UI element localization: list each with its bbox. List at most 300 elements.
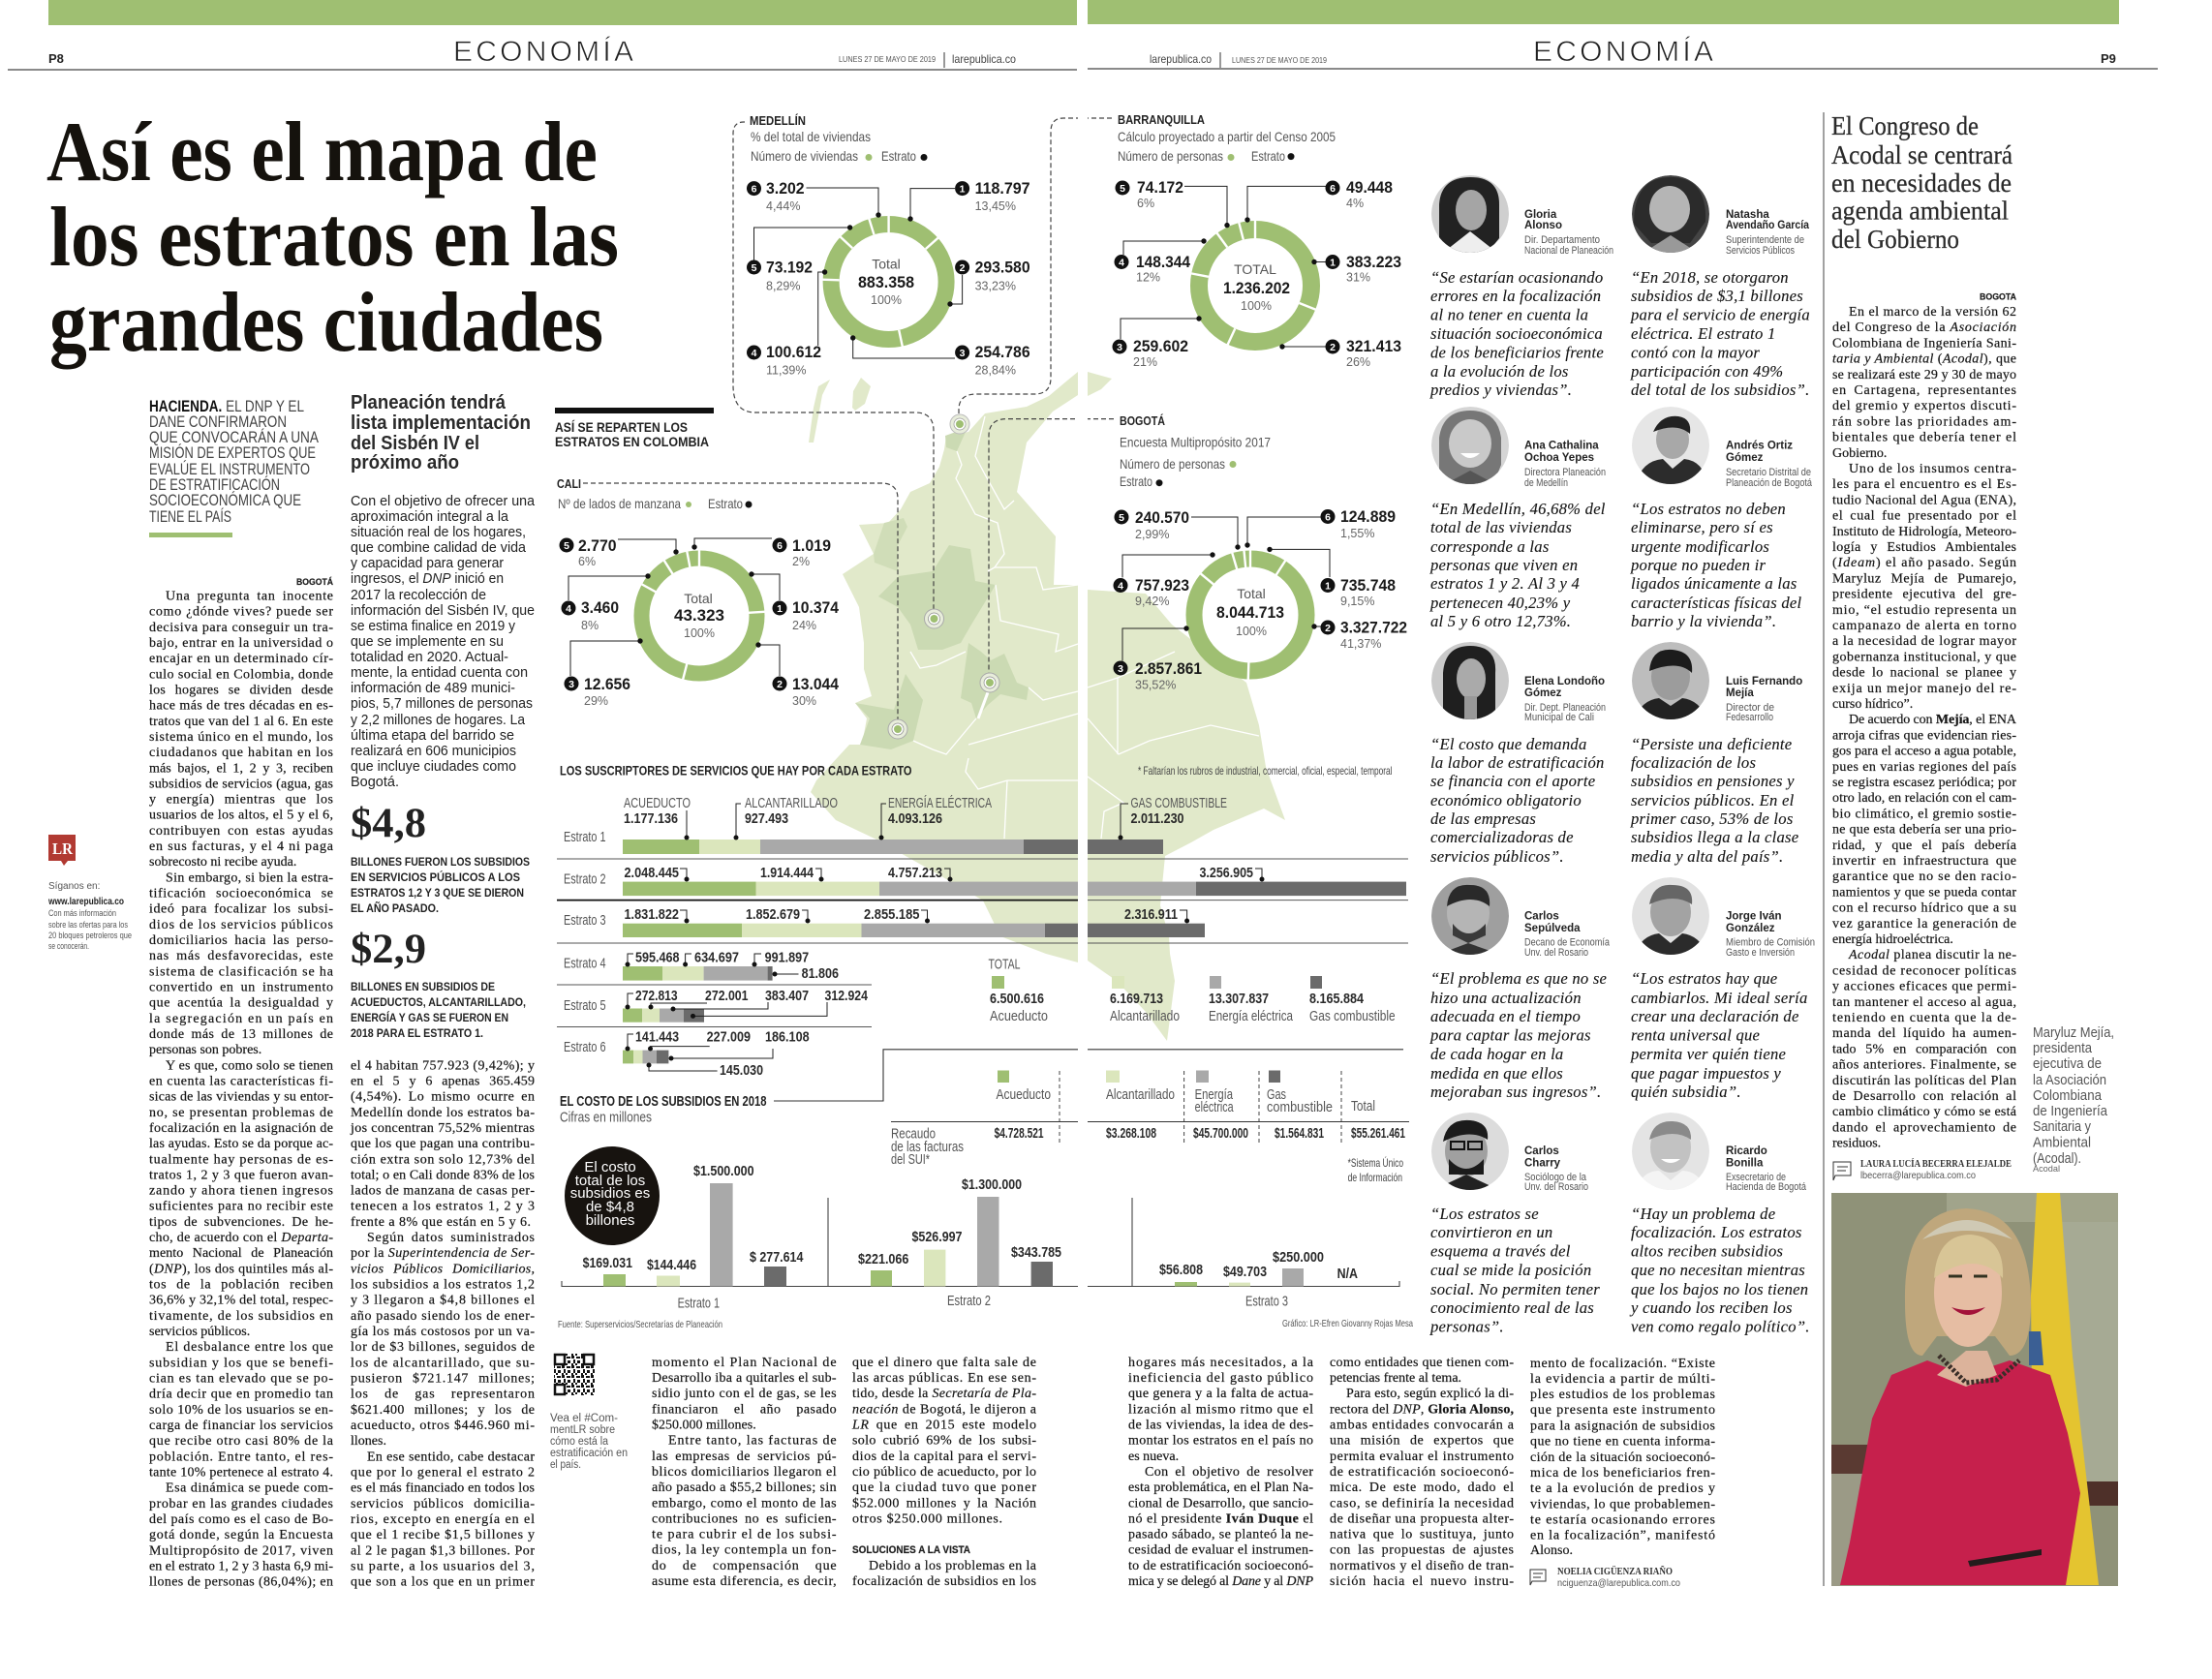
side story body: gobernanza institucional, y que (1832, 650, 2016, 664)
column 2 body (350, 1058, 535, 1590)
side story headline: agenda ambiental (1831, 196, 2009, 225)
side story body: gos para el acceso a agua potable, (1832, 745, 2016, 759)
quote block Natasha Avendaño: contó con la mayor (1631, 344, 1760, 362)
article column 4: otros $250.000 millones. (852, 1511, 1002, 1526)
article column 1: en sus facturas, y el 4 ni paga (149, 840, 334, 854)
Cali values: 6 (777, 540, 783, 552)
Cali values: 10.374 (792, 598, 839, 617)
estrato 6 row: Estrato 6 (564, 1039, 606, 1055)
estrato 1 row: 4.093.126 (888, 811, 942, 827)
article column 1: BOGOTÁ (296, 577, 333, 588)
quote block Ana Cathalina Ochoa: total de las viviendas (1430, 518, 1572, 536)
Medellín values: 3 (960, 348, 966, 359)
article column 6: como entidades que tienen com- (1330, 1356, 1514, 1370)
credit: Gráfico: LR-Efren Giovanny Rojas Mesa (1282, 1318, 1413, 1329)
quote block Ricardo Bonilla: que los bajos no los tienen (1631, 1280, 1808, 1298)
Bogotá values: 124.889 (1340, 507, 1396, 526)
article column 1: que recibe otro casi 80% de la (149, 1434, 334, 1449)
sidebar intro text: totalidad en 2020. Actual- (351, 650, 508, 665)
photo caption: Sanitaria y (2033, 1119, 2092, 1135)
Medellín values: 28,84% (975, 364, 1016, 378)
quote block Carlos Charry: Sociólogo de la (1524, 1172, 1587, 1183)
column 2 body: Medellín donde los estratos ba- (351, 1106, 535, 1120)
quote block Carlos Sepúlveda: “El problema es que no se (1430, 969, 1607, 988)
quote block Carlos Sepúlveda: Unv. del Rosario (1524, 947, 1588, 959)
quote block Elena Londoño: Elena Londoño (1524, 676, 1605, 687)
column 2 body: acueducto, otros $446.960 mi- (351, 1419, 535, 1433)
article column 7: que presenta este instrumento (1530, 1403, 1715, 1418)
article column 1: gotá donde, según la Encuesta (149, 1528, 334, 1542)
sidebar LR follow: LR (52, 840, 74, 858)
Medellín values: 33,23% (975, 279, 1016, 292)
quote block Ricardo Bonilla: que no necesitan mientras (1631, 1261, 1805, 1279)
QR caption: mentLR sobre (550, 1424, 615, 1436)
quote block Andrés Ortiz: Andrés Ortiz (1726, 440, 1793, 451)
donut Barranquilla: 100% (1241, 299, 1272, 313)
article column 6: una misión de expertos que (1330, 1434, 1514, 1449)
quote block Carlos Charry: personas”. (1429, 1317, 1504, 1336)
infographic heading: ASÍ SE REPARTEN LOS (555, 419, 688, 435)
Cali values: 2 (777, 679, 783, 690)
article column 5: mica y se delegó al Dane y al DNP (1128, 1574, 1313, 1589)
quote block Luis Fernando Mejía: Mejía (1726, 687, 1754, 699)
side story body: vez garantice la generación de (1832, 917, 2016, 931)
revenue table: eléctrica (1195, 1099, 1234, 1115)
article column 1: que acentúa la desigualdad y (149, 996, 333, 1011)
quote block Ricardo Bonilla: “Hay un problema de (1631, 1205, 1775, 1223)
Cali values: 4 (566, 603, 571, 615)
sidebar intro text: que se implemente en su (351, 634, 504, 650)
bars estrato 3: $56.808 (1159, 1263, 1203, 1278)
article column 1: ideó para focalizar los subsi- (149, 902, 333, 917)
chart footnote: * Faltarían los rubros de industrial, comercial, oficial, especial, temporal (1138, 764, 1393, 778)
Medellín values: 73.192 (766, 259, 813, 277)
donut Bogotá: 8.044.713 (1216, 603, 1284, 622)
photo caption: Ambiental (2033, 1136, 2091, 1151)
totals legend: 13.307.837 (1209, 992, 1269, 1007)
sidebar LR follow: 20 bloques petroleros que (48, 931, 132, 940)
article column 4: SOLUCIONES A LA VISTA (852, 1544, 970, 1556)
sidebar heading (351, 392, 531, 473)
estrato 5 row (564, 989, 868, 1023)
Medellín values: 8,29% (766, 279, 800, 292)
donut Bogotá: 100% (1236, 625, 1267, 638)
side story body: dando el aprovechamiento de (1832, 1120, 2016, 1135)
column 2 body: lados de manzana de casas per- (351, 1184, 535, 1199)
article column 4: cio público de acueducto, por lo (852, 1465, 1036, 1480)
quote block Luis Fernando Mejía: Fedesarrollo (1726, 712, 1773, 723)
Cali values: 2.770 (578, 536, 616, 555)
column 2 body: servicios públicos domicilia- (351, 1497, 535, 1511)
Barranquilla values: 5 (1120, 183, 1125, 195)
article column 6: de diseñar una propuesta alter- (1330, 1511, 1514, 1526)
header P8: P8 (48, 51, 64, 66)
infographic heading (555, 408, 714, 449)
stat 4,8 billones (351, 801, 530, 915)
article column 6: permita evaluar el instrumento (1330, 1450, 1514, 1464)
side story body: (Ideam) el año pasado. Según (1832, 556, 2016, 570)
quote block Andrés Ortiz: urgente modificarlos (1631, 537, 1769, 556)
Bogotá values: 9,42% (1135, 595, 1169, 608)
Bogotá values (1114, 507, 1407, 692)
Medellín values: 6 (752, 184, 757, 196)
sidebar intro text: que incluye ciudades como (351, 759, 516, 775)
header band right (1088, 0, 2119, 24)
axes (562, 1198, 1399, 1286)
quotes: portrait Carlos Sepúlveda (1431, 877, 1509, 955)
title: los estratos en las (49, 191, 619, 285)
article column 3: Entre tanto, las facturas de (668, 1434, 837, 1449)
panel: Bogotá: Encuesta Multipropósito 2017 (1120, 435, 1271, 450)
column 2 body: ción extra son solo 12,73% del (351, 1152, 535, 1167)
Barranquilla values: 321.413 (1346, 337, 1401, 355)
subheading hacienda: SOCIOECONÓMICA QUE (149, 491, 301, 509)
sidebar intro text: información del Sisbén IV, que (351, 603, 535, 619)
quotes: portrait Ana Cathalina Ochoa (1431, 407, 1509, 484)
article column 1: tante 10% pertenece al estrato 4. (149, 1466, 333, 1480)
article column 6: nativa que lo sustituya, junto (1330, 1528, 1514, 1542)
stat 4,8 billones: ESTRATOS 1,2 Y 3 QUE SE DIERON (351, 888, 524, 900)
quote block Natasha Avendaño: Superintendente de (1726, 234, 1804, 246)
panel: Barranquilla: Cálculo proyectado a partir del Censo 2005 (1118, 129, 1336, 144)
Medellín values: 11,39% (766, 364, 806, 378)
side story body: taria y Ambiental (Acodal), que (1832, 352, 2016, 367)
Cali values: 3 (568, 679, 574, 690)
quote block Carlos Sepúlveda: medida en que ellos (1430, 1064, 1563, 1083)
quote block Luis Fernando Mejía: Director de (1726, 702, 1774, 714)
Cali values: 30% (792, 694, 816, 708)
Bogotá values: 35,52% (1135, 679, 1176, 692)
side story body: presidente ejecutiva del gre- (1832, 588, 2016, 602)
estrato 3 row: 2.855.185 (864, 907, 920, 923)
quote block Ricardo Bonilla: focalización. Los estratos (1631, 1223, 1802, 1241)
Bogotá values: 1 (1325, 581, 1331, 593)
article column 7 (1530, 1357, 1715, 1558)
sidebar intro text: y 2,2 millones de hogares. La (351, 713, 526, 728)
article column 1: mento Nacional de Planeación (149, 1246, 333, 1261)
article column 1: y energía) mientras que los (149, 793, 333, 808)
article column 1: tratos que van del 1 al 6. En este (149, 715, 333, 729)
side story body: teniendo en cuenta que la de- (1832, 1011, 2016, 1025)
sidebar heading: lista implementación (351, 412, 531, 434)
side story body: Uno de los insumos centra- (1849, 462, 2016, 476)
photo caption: Maryluz Mejía, (2033, 1025, 2114, 1041)
side story body: De acuerdo con Mejía, el ENA (1849, 713, 2017, 727)
quote block Elena Londoño: Municipal de Cali (1524, 712, 1594, 723)
side story body: En el marco de la versión 62 (1849, 305, 2016, 320)
panel: Cali: Estrato (708, 496, 743, 511)
cost subtitle: Cifras en millones (560, 1110, 652, 1125)
article column 1: sistema único en el mundo, los (149, 730, 333, 745)
estrato 1 row: 1.177.136 (624, 811, 678, 827)
totals legend: Acueducto (990, 1008, 1048, 1024)
Barranquilla values: 259.602 (1133, 337, 1188, 355)
quote block Ricardo Bonilla: Bonilla (1726, 1158, 1764, 1170)
Bogotá values: 2 (1325, 623, 1331, 634)
estrato 1 row: 927.493 (745, 811, 788, 827)
estrato 4 row: 991.897 (765, 951, 809, 966)
Medellín values: 5 (752, 262, 757, 274)
quote block Andrés Ortiz: Planeación de Bogotá (1726, 477, 1813, 489)
QR caption (550, 1413, 628, 1471)
article column 7: te a la evolución de predios y (1530, 1481, 1715, 1496)
quote block Andrés Ortiz: ligados únicamente a las (1631, 574, 1797, 593)
article column 2 (350, 392, 536, 1590)
article column 1: carga de financiar los servicios (149, 1419, 333, 1433)
estrato 6 row (564, 1030, 810, 1079)
quote block Luis Fernando Mejía: primer caso, 53% de los (1630, 809, 1794, 828)
article column 1: Sin embargo, si bien la estra- (166, 870, 333, 885)
Barranquilla values: 2 (1330, 342, 1336, 353)
sidebar intro text (351, 494, 536, 790)
article column 1: del país como es el caso de Bo- (149, 1512, 333, 1527)
article column 1: donde más de 13 millones de (149, 1027, 333, 1042)
Barranquilla values: 31% (1346, 271, 1370, 285)
estrato 1 row: 2.011.230 (1131, 811, 1183, 827)
side story body: se registra escasez periódica; por (1832, 776, 2016, 790)
Barranquilla values: 4 (1119, 258, 1124, 269)
quote block Carlos Charry: conocimiento real de las (1430, 1298, 1594, 1317)
quote block Ana Cathalina Ochoa: estratos 1 y 2. Al 3 y 4 (1430, 574, 1580, 593)
side story body: el cual fue presentado por el (1832, 509, 2016, 524)
side story body: en Cartagena, representantes (1832, 383, 2016, 398)
totals legend (988, 956, 1396, 1024)
article column 1: solo 10% de los usuarios se en- (149, 1403, 333, 1418)
article column 6 (1330, 1356, 1515, 1589)
estrato 4 row: Estrato 4 (564, 956, 606, 972)
article column 1: decisiva para conseguir un tra- (149, 621, 333, 635)
quotes: portrait Elena Londoño (1431, 642, 1509, 719)
donut Barranquilla: 1.236.202 (1223, 279, 1290, 297)
bars estrato 2: $221.066 (858, 1252, 908, 1267)
article column 7: que no tiene en cuenta informa- (1530, 1435, 1715, 1449)
article column 4: neación de Bogotá, le dijeron a (852, 1402, 1037, 1417)
side story body: Colombiana de Ingeniería Sani- (1832, 336, 2016, 351)
side story body: discutirán las políticas del Plan (1832, 1074, 2016, 1088)
estrato 3 row: 1.852.679 (746, 907, 800, 923)
quote block Gloria Alonso: Dir. Departamento (1524, 234, 1600, 246)
article column 1: nas más desfavorecidas, este (149, 949, 333, 963)
column 2 body: su parte, a los usuarios del 3, (351, 1559, 535, 1573)
Barranquilla values: 26% (1346, 355, 1370, 369)
revenue table: de Información (1348, 1171, 1402, 1184)
quote block Jorge Iván González: que pagar impuestos y (1631, 1064, 1781, 1083)
quote block Carlos Sepúlveda: para captar las mejoras (1429, 1026, 1591, 1044)
Medellín values: 1 (960, 184, 966, 196)
revenue table (891, 1071, 1409, 1184)
callout: total cost: subsidios es (570, 1185, 650, 1202)
quote block Natasha Avendaño: participación con 49% (1630, 362, 1783, 381)
quote block Carlos Sepúlveda: hizo una actualización (1430, 989, 1582, 1007)
side story headline: El Congreso de (1831, 111, 1979, 140)
bars estrato 2: $526.997 (912, 1230, 963, 1245)
article column 1: los hogares se dividen desde (149, 684, 333, 697)
quote block Jorge Iván González: Jorge Iván (1726, 910, 1782, 922)
donut Bogotá: Total (1237, 586, 1266, 601)
totals legend: 8.165.884 (1309, 992, 1364, 1007)
sidebar intro text: realizará en 606 municipios (351, 744, 516, 759)
sidebar intro text: Bogotá. (351, 775, 399, 790)
Medellín values: 4 (752, 348, 757, 359)
Cali values: 8% (581, 619, 599, 632)
sidebar intro text: Con el objetivo de ofrecer una (351, 494, 536, 509)
quote block Ricardo Bonilla: y cuando los reciben los (1629, 1298, 1793, 1317)
donut Bogotá (1194, 549, 1306, 681)
article column 4: LR que en 2015 este modelo (851, 1419, 1036, 1433)
column 2 body: Según datos suministrados (367, 1231, 535, 1245)
panel: Cali (557, 476, 898, 721)
header P8: larepublica.co (952, 52, 1016, 66)
sidebar LR follow: Síganos en: (48, 881, 100, 892)
article column 7: Alonso. (1530, 1543, 1573, 1558)
quote block Carlos Charry: social. No permiten tener (1430, 1280, 1600, 1298)
quote block Andrés Ortiz: eliminarse, pero sí es (1631, 518, 1773, 536)
bars estrato 3 (1159, 1250, 1358, 1310)
side story body: logía y Estudios Ambientales (1832, 540, 2016, 555)
article column 1: probar en las grandes ciudades (149, 1497, 333, 1511)
Barranquilla values: 383.223 (1346, 253, 1401, 271)
article column 7: la evidencia a partir de múlti- (1530, 1372, 1715, 1387)
article column 3: las empresas de servicios pú- (652, 1450, 837, 1464)
article column 6: rectora del DNP, Gloria Alonso, (1330, 1402, 1514, 1417)
quote block Carlos Sepúlveda: Carlos (1524, 910, 1559, 922)
article column 3: $250.000 millones. (652, 1419, 756, 1433)
side story body: años anteriores. Finalmente, se (1832, 1058, 2016, 1073)
column 2 body: gía los más costosos por un va- (351, 1325, 535, 1339)
article column 1: Esa dinámica se puede com- (166, 1481, 333, 1496)
revenue table: $3.268.108 (1106, 1126, 1156, 1142)
side story headline: Acodal se centrará (1831, 140, 2012, 169)
sidebar intro text: situación real de los hogares, (351, 525, 526, 540)
quote block Elena Londoño (1430, 676, 1606, 866)
quote block Natasha Avendaño: eléctrica. El estrato 1 (1631, 324, 1776, 343)
quote block Luis Fernando Mejía: focalización de los (1631, 753, 1756, 772)
panel: Cali: CALI (557, 476, 581, 491)
side story body: BOGOTA (1980, 292, 2016, 303)
article column 1: tos de la población reciben (149, 1278, 333, 1292)
quote block Natasha Avendaño: Natasha (1726, 209, 1769, 221)
stat 4,8 billones: $4,8 (351, 801, 426, 846)
estrato 6 row: 141.443 (635, 1030, 679, 1046)
bars estrato 2: Estrato 2 (947, 1293, 991, 1309)
estrato 3 row: 1.831.822 (624, 907, 679, 923)
Bogotá values: 1,55% (1340, 527, 1374, 540)
article column 1: como ¿dónde vives? puede ser (149, 605, 333, 620)
article column 6: con las propuestas de ajustes (1330, 1543, 1514, 1558)
column 2 body: vicios Públicos Domiciliarios, (351, 1262, 535, 1276)
estrato 3 row: Estrato 3 (564, 912, 606, 929)
quote block Natasha Avendaño: Avendaño García (1726, 220, 1810, 231)
quote block Jorge Iván González (1630, 910, 1815, 1101)
quote block Ana Cathalina Ochoa: “En Medellín, 46,68% del (1430, 500, 1606, 518)
sidebar intro text: y capacidad para generar (351, 556, 504, 571)
callout: total cost: total de los (575, 1173, 645, 1189)
article column 7: viviendas, lo que probablemen- (1530, 1497, 1715, 1512)
column 2 body: que por lo general el estrato 2 (351, 1466, 535, 1480)
stat 2,9 billones: 2018 PARA EL ESTRATO 1. (351, 1028, 483, 1040)
column 2 body: y 3 llegaron a $4,8 billones el (351, 1294, 535, 1308)
side story body: con el recurso hídrico que a su (1832, 901, 2016, 916)
header P9: P9 (2101, 51, 2116, 66)
article column 1 (149, 577, 334, 1590)
article column 5: Con el objetivo de resolver (1145, 1465, 1313, 1480)
column 2 body: total; o en Cali donde 83% de los (351, 1168, 535, 1182)
quote block Gloria Alonso (1429, 209, 1613, 399)
quote block Andrés Ortiz: barrio y la vivienda”. (1631, 612, 1776, 630)
Cali values: 29% (584, 694, 608, 708)
side story body: residuos. (1832, 1137, 1881, 1151)
sidebar intro text: última etapa del barrido se (351, 728, 514, 744)
article column 1: las ayudas. Esto se da porque ac- (149, 1137, 333, 1151)
estrato 4 row: 634.697 (694, 951, 739, 966)
quote block Luis Fernando Mejía: servicios públicos. En el (1631, 791, 1795, 809)
quote block Carlos Sepúlveda: Sepúlveda (1524, 923, 1581, 934)
article column 3: embargo, como el monto de las (652, 1496, 837, 1511)
article column 5: lización al mismo ritmo que el (1128, 1402, 1313, 1417)
article column 4: Debido a los problemas en la (869, 1559, 1037, 1573)
Barranquilla values: 21% (1133, 355, 1157, 369)
quote block Gloria Alonso: Alonso (1524, 220, 1562, 231)
quote block Carlos Sepúlveda (1429, 910, 1611, 1101)
estrato 4 row (564, 951, 839, 982)
revenue table: $55.261.461 (1351, 1126, 1405, 1142)
article column 3: financiaron el año pasado (652, 1402, 837, 1417)
revenue table: *Sistema Único (1348, 1155, 1403, 1170)
estrato 2 row: 2.048.445 (624, 866, 679, 881)
estrato 2 row: Estrato 2 (564, 871, 606, 888)
Cali values: 6% (578, 555, 596, 568)
title: grandes ciudades (49, 276, 603, 370)
Barranquilla values: 3 (1117, 342, 1122, 353)
map of Colombia (809, 372, 1285, 1041)
photo caption: Acodal (2033, 1164, 2060, 1175)
quote block Gloria Alonso: “Se estarían ocasionando (1430, 268, 1603, 287)
revenue table: Gas (1267, 1086, 1286, 1103)
stat 4,8 billones: EN SERVICIOS PÚBLICOS A LOS (351, 871, 520, 884)
side story body: les para el encuentro es el Es- (1832, 477, 2016, 492)
donut Cali (641, 549, 766, 681)
quote block Elena Londoño: servicios públicos”. (1430, 847, 1564, 866)
callout: total cost: de $4,8 (586, 1199, 634, 1215)
panel: Bogotá: Número de personas (1120, 456, 1225, 472)
quote block Natasha Avendaño: subsidios de $3,1 billones (1631, 287, 1803, 305)
byline Laura Lucía Becerra: lbecerra@larepublica.com.co (1860, 1170, 1976, 1181)
article column 5: esta problemática, en el Plan Na- (1128, 1481, 1313, 1495)
subheading hacienda: TIENE EL PAÍS (149, 507, 231, 526)
article column 5: de las viviendas, la idea de des- (1128, 1419, 1313, 1433)
header P8: ECONOMÍA (453, 36, 633, 68)
article column 5 (1128, 1356, 1314, 1589)
side story body: bio climático, el gremio sostie- (1832, 807, 2016, 821)
bars estrato 1: $144.446 (647, 1258, 696, 1273)
column 2 body: que son a los que en un primer (351, 1575, 535, 1590)
side story body: rán sobre las prioridades am- (1832, 414, 2016, 429)
column 2 body: los subsidios a los estratos 1,2 (351, 1278, 535, 1292)
Barranquilla values: 6% (1137, 197, 1154, 210)
bars estrato 2 (858, 1177, 1061, 1309)
article column 7: te estaría ocasionando errores (1530, 1512, 1715, 1528)
revenue table: $4.728.521 (995, 1126, 1044, 1142)
stat 2,9 billones: BILLONES EN SUBSIDIOS DE (351, 982, 495, 993)
column 2 body: que los que pagan una contribu- (351, 1137, 535, 1151)
photo caption: Colombiana (2033, 1088, 2103, 1104)
article column 6: de estratificación socioeconó- (1330, 1465, 1514, 1480)
quote block Gloria Alonso: al no tener en cuenta la (1430, 306, 1588, 323)
stat 2,9 billones: ENERGÍA Y GAS SE FUERON EN (351, 1012, 508, 1024)
panel: Barranquilla: Estrato (1251, 148, 1285, 164)
bars estrato 1: $1.500.000 (693, 1164, 754, 1179)
title: Así es el mapa de (46, 106, 598, 199)
